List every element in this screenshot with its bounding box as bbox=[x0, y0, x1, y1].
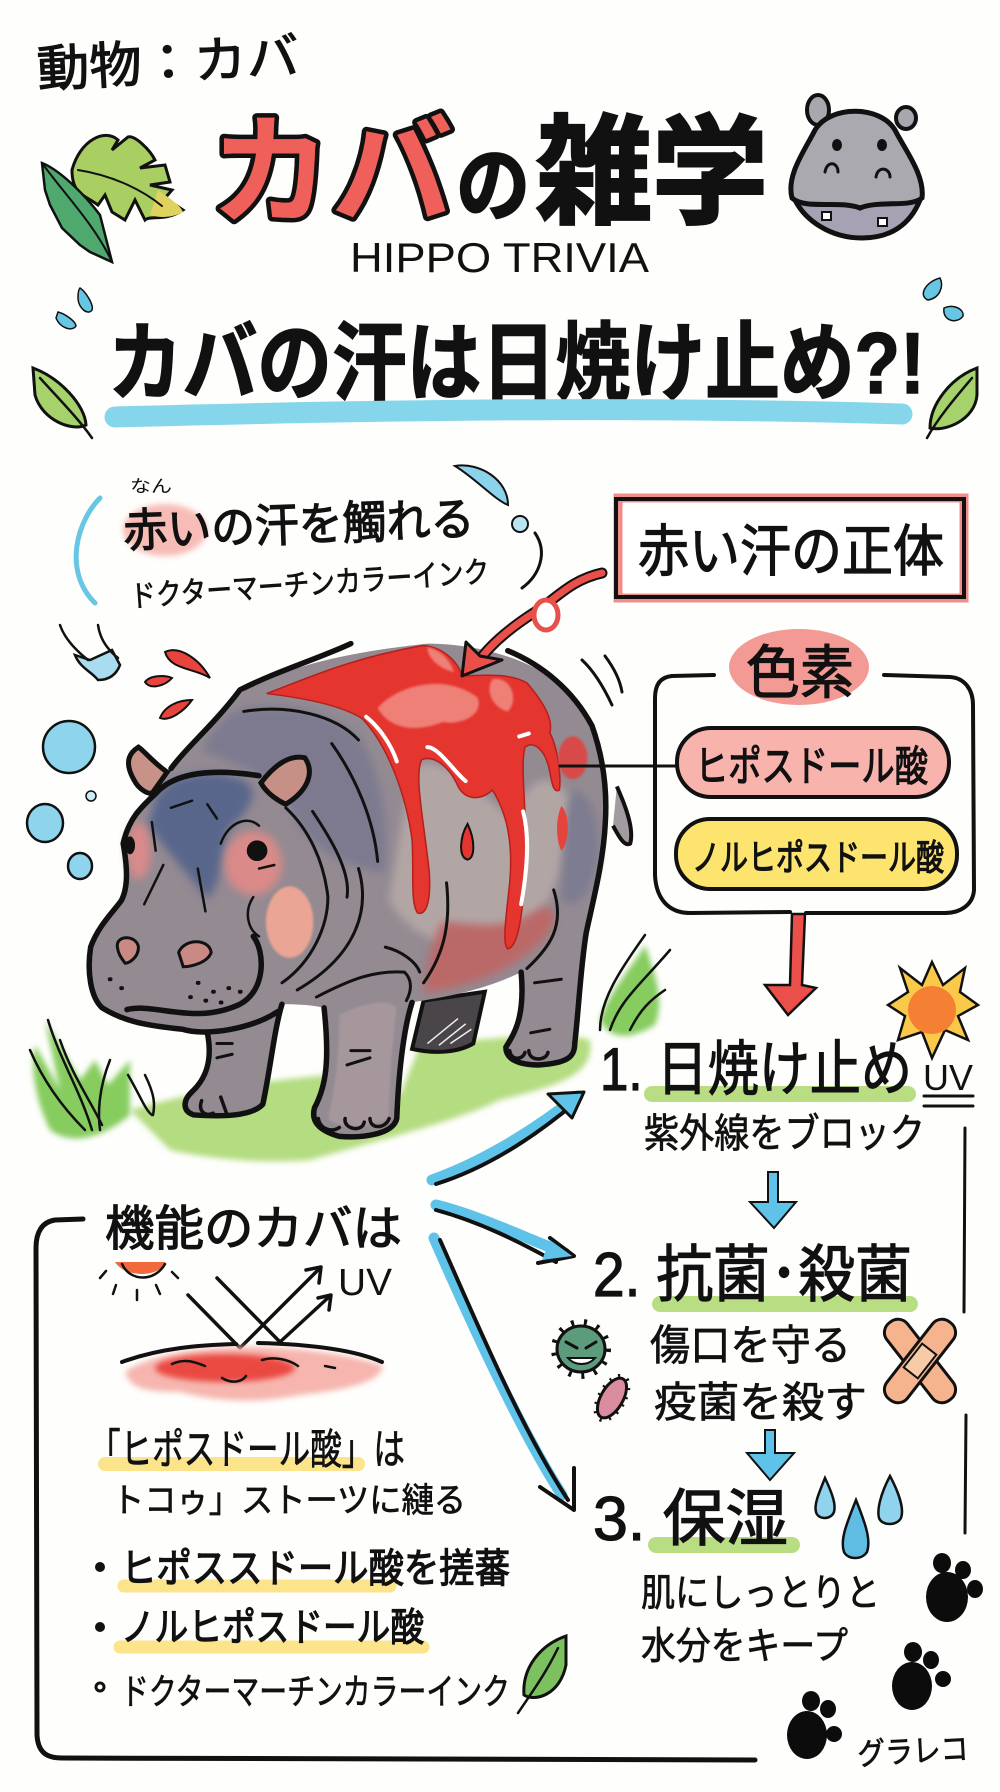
paw prints bbox=[787, 1553, 983, 1759]
blue down arrow 1 bbox=[750, 1172, 796, 1228]
pill: hipposudoric acid: ヒポスドール酸 bbox=[695, 743, 928, 790]
water drop near caption bbox=[455, 465, 528, 532]
splash marks bbox=[60, 625, 210, 719]
panel list bbox=[95, 1547, 510, 1712]
benefit 2: 2. 抗菌･殺菌 bbox=[593, 1241, 912, 1310]
UV mark: UV bbox=[923, 1057, 973, 1098]
white highlights bbox=[366, 717, 529, 904]
hind far leg bbox=[412, 992, 485, 1052]
pill: hipposudoric acid bbox=[677, 728, 949, 797]
pill: norhipposudoric acid bbox=[676, 819, 957, 889]
pigment heading blob bbox=[729, 629, 869, 706]
benefit 3 bbox=[593, 1485, 880, 1668]
box: red sweat identity: 赤い汗の正体 bbox=[638, 520, 944, 583]
nostril right bbox=[179, 942, 211, 967]
body light side bbox=[389, 763, 573, 947]
benefit 3: 肌にしっとりと bbox=[641, 1573, 880, 1615]
body lower red tint bbox=[424, 907, 554, 994]
credit: グラレコ bbox=[857, 1731, 969, 1772]
ground wash bbox=[130, 1036, 590, 1161]
cheek bbox=[266, 886, 313, 958]
icon: tropical leaves bbox=[42, 135, 183, 262]
hippo body bbox=[89, 644, 607, 1137]
red sweat bbox=[267, 645, 560, 949]
rump blue tint bbox=[561, 790, 599, 904]
hippo outline bbox=[89, 644, 606, 1137]
icon: sun bbox=[888, 962, 978, 1058]
water drops left bbox=[56, 288, 92, 329]
leaf icon bbox=[518, 1636, 566, 1713]
box: red sweat identity bbox=[616, 498, 964, 598]
leaf left bbox=[33, 368, 92, 438]
head blue tint bbox=[148, 773, 252, 899]
body fold lines bbox=[217, 709, 561, 1065]
note: red sweat caption: なん bbox=[130, 477, 172, 496]
benefit 2: 傷口を守る bbox=[650, 1322, 851, 1369]
red arrow to hippo back bbox=[462, 573, 602, 676]
toes bbox=[201, 1051, 548, 1130]
note: red sweat caption: 赤いの汗を觸れる bbox=[123, 493, 475, 557]
benefit 2 bbox=[593, 1241, 912, 1426]
leader line from drip to pill bbox=[560, 764, 676, 768]
panel heading: 機能のカバは bbox=[105, 1203, 402, 1256]
benefit 2: 疫菌を殺す bbox=[654, 1379, 867, 1426]
bubbles bbox=[27, 721, 96, 879]
eye pink patch bbox=[225, 831, 282, 895]
benefit 1 bbox=[600, 1036, 925, 1156]
main title: 雑学 bbox=[536, 108, 768, 240]
red pale blotches bbox=[378, 647, 513, 728]
shoulder blue tint bbox=[202, 706, 386, 872]
main title bbox=[210, 106, 768, 240]
panel list: ヒポススドール酸を搓蕃 bbox=[121, 1547, 510, 1591]
leg light tint bbox=[328, 1003, 397, 1127]
benefit 1: 1. 日焼け止め bbox=[600, 1036, 912, 1103]
icon: bandage bbox=[880, 1314, 960, 1408]
main title: カバ bbox=[210, 106, 453, 240]
far leg hatch bbox=[427, 1019, 471, 1045]
pigment bracket bbox=[655, 675, 974, 913]
left ear bbox=[129, 747, 167, 794]
icon: bacterium bbox=[590, 1371, 634, 1425]
hippo illustration bbox=[89, 644, 631, 1137]
mouth bbox=[127, 936, 261, 1014]
head wrinkles bbox=[144, 801, 274, 936]
benefit 3: 3. 保湿 bbox=[593, 1485, 788, 1554]
left grass bbox=[30, 1020, 154, 1138]
blue down arrow 2 bbox=[747, 1430, 794, 1480]
subtitle: HIPPO TRIVIA: HIPPO TRIVIA bbox=[350, 234, 649, 281]
panel: function of hippo sweat bbox=[36, 1203, 755, 1760]
category label: 動物：カバ bbox=[36, 28, 300, 98]
panel list: ドクターマーチンカラーインク bbox=[121, 1671, 510, 1712]
whisker dots bbox=[110, 979, 241, 1002]
eye bbox=[247, 840, 267, 861]
blue arrow to benefit 3 bbox=[434, 1238, 574, 1510]
UV label: UV bbox=[338, 1262, 393, 1304]
skin wash bbox=[122, 1343, 382, 1401]
red arrow down to benefits bbox=[765, 914, 816, 1015]
main title: の bbox=[456, 141, 530, 232]
icon: germ bbox=[554, 1322, 608, 1376]
far eye patch bbox=[126, 822, 151, 879]
panel explanation: 「ヒポスドール酸」は bbox=[89, 1426, 405, 1473]
blue arrow to benefit 1 bbox=[432, 1092, 584, 1184]
motion lines bbox=[582, 656, 622, 705]
note: red sweat caption: ドクターマーチンカラーインク bbox=[129, 556, 491, 614]
sun diagram bbox=[100, 1262, 178, 1300]
right grass bbox=[600, 935, 670, 1036]
blue arrow to benefit 2 bbox=[436, 1205, 574, 1263]
panel explanation: トコゥ」ストーツに縺る bbox=[112, 1482, 466, 1520]
pigment heading blob: 色素 bbox=[746, 641, 854, 706]
UV reflection arrows bbox=[188, 1267, 331, 1348]
note: red sweat caption bbox=[76, 477, 541, 614]
icon: hippo head bbox=[791, 95, 922, 238]
right side line bbox=[964, 1128, 966, 1533]
benefit 3: 水分をキープ bbox=[641, 1626, 848, 1668]
benefit 1: 紫外線をブロック bbox=[644, 1112, 925, 1156]
panel explanation bbox=[89, 1426, 466, 1520]
icon: water drops bbox=[815, 1476, 902, 1558]
leaf right bbox=[927, 368, 977, 438]
red drop and side marks bbox=[461, 824, 473, 860]
right ear bbox=[261, 757, 309, 804]
headline blue underline bbox=[115, 410, 902, 417]
water drops right bbox=[923, 278, 963, 321]
panel list: ノルヒポスドール酸 bbox=[121, 1607, 424, 1650]
nostril left bbox=[117, 938, 138, 963]
far eye bbox=[125, 836, 135, 854]
tail bbox=[613, 786, 631, 844]
